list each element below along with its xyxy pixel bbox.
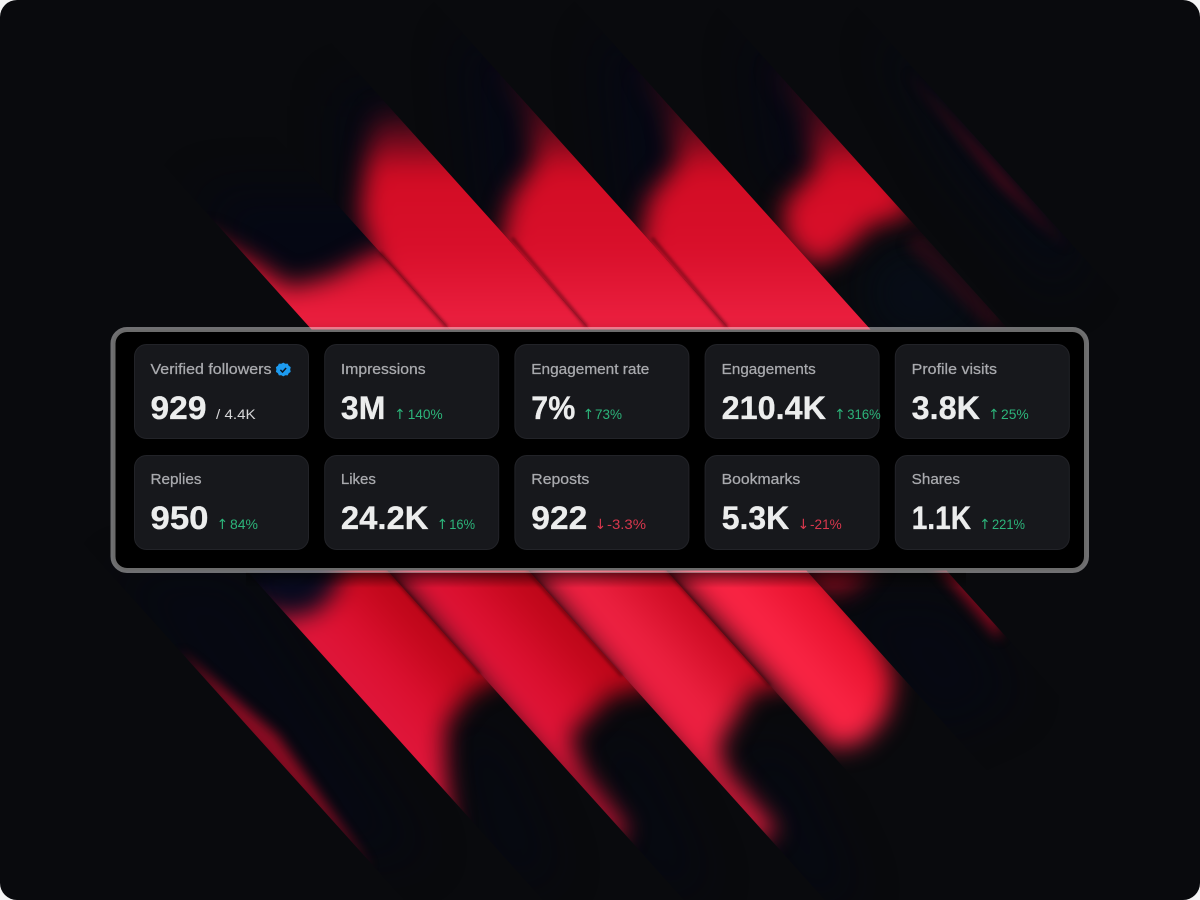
card: impressions: ↑ bbox=[394, 407, 406, 423]
card: verified followers: / 4.4K bbox=[216, 406, 256, 422]
card: engagements: Engagements bbox=[722, 362, 816, 378]
card: engagements bbox=[705, 344, 881, 438]
card: replies bbox=[134, 456, 308, 550]
card: impressions: 3M bbox=[341, 390, 385, 426]
card: shares: Shares bbox=[912, 472, 960, 488]
card: impressions bbox=[325, 344, 499, 438]
card: profile visits bbox=[895, 344, 1069, 438]
panel drop shadow bbox=[246, 572, 966, 588]
card: engagements: 316% bbox=[847, 406, 881, 422]
card: verified followers: 929 bbox=[150, 390, 206, 426]
card: shares: 221% bbox=[992, 516, 1025, 532]
card: impressions: Impressions bbox=[341, 362, 426, 378]
card: shares: ↑ bbox=[979, 517, 991, 533]
card: likes: ↑ bbox=[436, 517, 448, 533]
card: shares: 1.1K bbox=[912, 500, 971, 536]
card: engagements: 210.4K bbox=[722, 390, 826, 426]
stats panel bbox=[113, 330, 1086, 570]
card: reposts: 922 bbox=[531, 500, 587, 536]
card: replies: ↑ bbox=[216, 517, 228, 533]
card: bookmarks: Bookmarks bbox=[722, 472, 800, 488]
card: engagement rate bbox=[515, 344, 689, 438]
card: likes: 24.2K bbox=[341, 500, 428, 536]
card: impressions: 140% bbox=[408, 406, 443, 422]
card: reposts: -3.3% bbox=[607, 516, 646, 532]
card: reposts bbox=[515, 456, 689, 550]
card: engagement rate: 73% bbox=[595, 406, 622, 422]
card: reposts: ↓ bbox=[594, 517, 606, 533]
card: replies: 84% bbox=[230, 516, 258, 532]
card: likes: 16% bbox=[449, 516, 475, 532]
edge shadows between stripes bbox=[380, 238, 727, 327]
card: engagement rate: ↑ bbox=[582, 407, 594, 423]
card: engagements: ↑ bbox=[834, 407, 846, 423]
card: verified followers bbox=[134, 344, 308, 438]
card: bookmarks: -21% bbox=[810, 516, 842, 532]
card: likes bbox=[325, 456, 499, 550]
card: engagement rate: 7% bbox=[531, 390, 575, 426]
card: profile visits: 25% bbox=[1001, 406, 1029, 422]
card: verified followers: Verified followers bbox=[150, 362, 272, 378]
card: profile visits: Profile visits bbox=[912, 362, 997, 378]
card: replies: Replies bbox=[150, 472, 202, 488]
icon: verified badge bbox=[276, 363, 291, 376]
artwork: lower diagonal red stripes bbox=[184, 570, 1006, 860]
card: replies: 950 bbox=[150, 500, 208, 536]
card: bookmarks bbox=[705, 456, 879, 550]
artwork: upper diagonal red stripes bbox=[218, 82, 1052, 330]
card: shares bbox=[895, 456, 1069, 550]
card: reposts: Reposts bbox=[531, 472, 589, 488]
card: bookmarks: ↓ bbox=[798, 517, 809, 533]
card: likes: Likes bbox=[341, 472, 376, 488]
card: profile visits: 3.8K bbox=[912, 390, 980, 426]
card: engagement rate: Engagement rate bbox=[531, 362, 649, 378]
card: bookmarks: 5.3K bbox=[722, 500, 789, 536]
card: profile visits: ↑ bbox=[988, 407, 1000, 423]
